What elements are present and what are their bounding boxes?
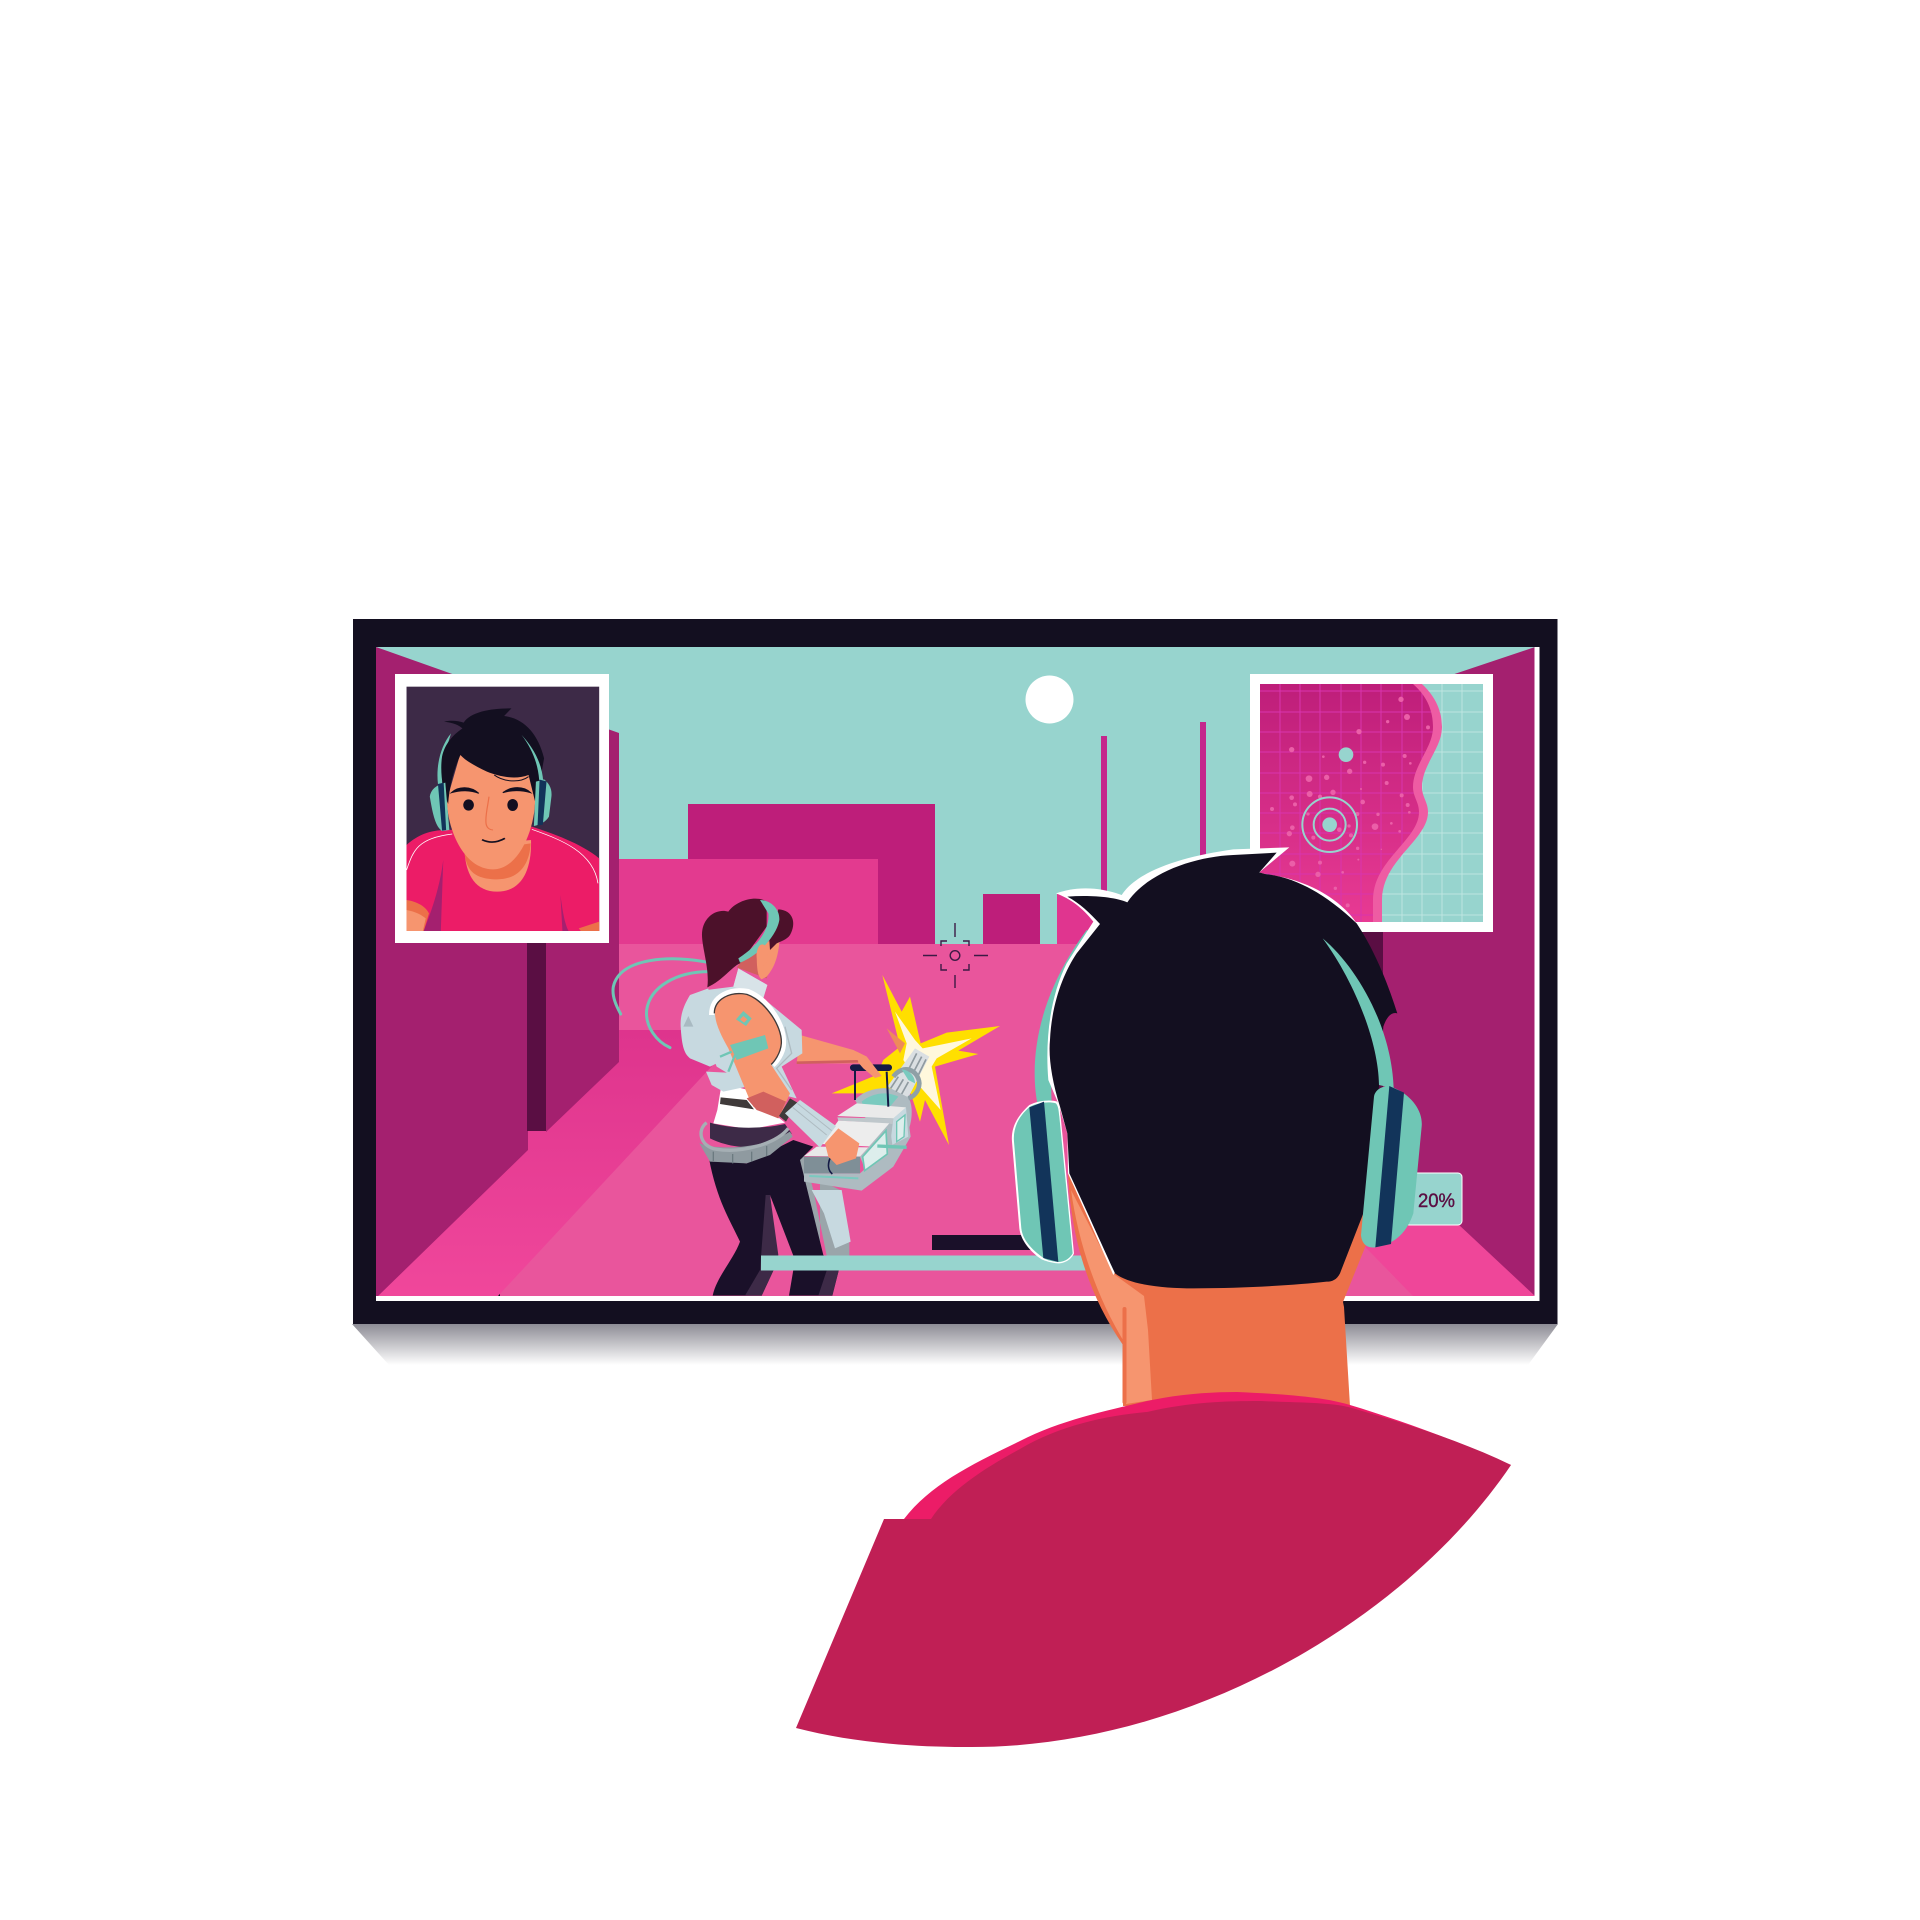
ammo badge: 20% xyxy=(1418,1191,1455,1212)
sky xyxy=(376,647,1535,1047)
right wall dark strip xyxy=(1360,925,1383,1125)
right floor xyxy=(1300,1180,1535,1296)
ammo badge xyxy=(1405,1173,1462,1225)
monitor shadow xyxy=(352,1324,1558,1365)
vest xyxy=(707,968,802,1098)
far building xyxy=(688,804,935,949)
gun xyxy=(804,1048,929,1191)
teal ammo bar xyxy=(761,1256,1101,1270)
black status bar xyxy=(932,1235,1042,1250)
far hand xyxy=(857,1052,882,1078)
moon xyxy=(1026,676,1074,724)
muzzle flash xyxy=(832,975,1000,1145)
distant blocks xyxy=(983,894,1117,944)
gun support xyxy=(793,1155,851,1256)
hair cables xyxy=(613,959,709,1048)
tattoo xyxy=(736,1011,752,1026)
webcam facial features xyxy=(451,775,531,842)
webcam headset xyxy=(430,735,552,831)
webcam face xyxy=(447,753,535,869)
viewer neck xyxy=(1068,1170,1390,1406)
hair xyxy=(1050,853,1397,1288)
bare arm xyxy=(712,991,790,1118)
viewer head xyxy=(1012,847,1422,1288)
hand xyxy=(825,1128,859,1165)
headset band left xyxy=(1035,930,1093,1103)
hair outline xyxy=(1047,847,1357,1275)
backpack xyxy=(681,988,747,1092)
left wall xyxy=(376,647,619,1298)
player character xyxy=(613,899,1000,1296)
gauntlet xyxy=(779,1098,836,1148)
left floor xyxy=(377,1030,712,1296)
crosshair xyxy=(923,923,988,988)
viewer shirt xyxy=(796,1392,1511,1747)
head xyxy=(702,899,793,987)
legs xyxy=(709,1140,839,1296)
webcam hair xyxy=(441,708,544,804)
webcam neck xyxy=(464,840,531,892)
webcam shirt xyxy=(407,827,599,931)
left ear cup xyxy=(1012,1101,1074,1263)
left wall dark strip xyxy=(527,940,546,1131)
webcam headset band xyxy=(437,733,451,784)
far arm xyxy=(797,1035,872,1064)
right wall xyxy=(1383,647,1535,1296)
gun handle xyxy=(853,1068,889,1107)
centre floor xyxy=(500,944,1500,1296)
waist xyxy=(699,1083,793,1163)
near building xyxy=(619,859,878,949)
screen white edge xyxy=(376,647,1537,1298)
right ear cup xyxy=(1361,1086,1422,1247)
game scene xyxy=(376,647,1537,1298)
headset band right xyxy=(1323,938,1394,1088)
poles xyxy=(1101,722,1206,916)
webcam panel xyxy=(395,674,609,943)
mini map xyxy=(1250,674,1493,932)
map markers xyxy=(1270,697,1430,907)
monitor frame xyxy=(353,619,1558,1324)
